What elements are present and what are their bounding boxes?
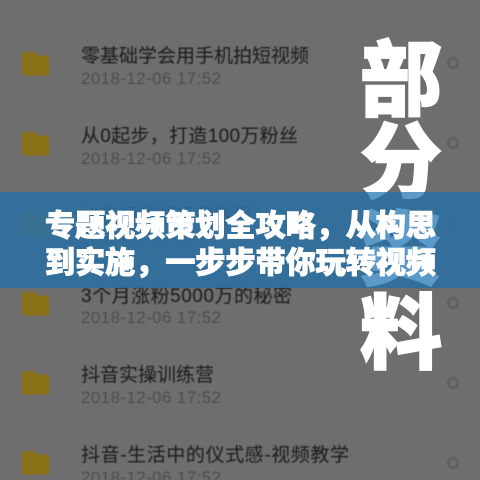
banner heading: 到实施，一步步带你玩转视频	[45, 246, 436, 280]
row 1: 2018-12-06 17:52	[81, 69, 221, 88]
row 3: 抖音短视频运营教程	[81, 205, 252, 227]
row 3	[22, 205, 458, 248]
blue banner	[0, 192, 480, 288]
large vertical title: 分	[360, 118, 442, 209]
row 5: 2018-12-06 17:52	[81, 388, 221, 407]
row 2	[22, 125, 458, 168]
large title seen through banner: 资	[360, 205, 442, 296]
row 4: 2018-12-06 17:52	[81, 308, 221, 327]
row 3: 2018-12-06 17:52	[81, 229, 221, 248]
row 2: 2018-12-06 17:52	[81, 149, 221, 168]
large title seen through banner: 分	[360, 118, 442, 209]
row 1: 零基础学会用手机拍短视频	[81, 45, 309, 67]
banner heading: 专题视频策划全攻略，从构思	[45, 209, 436, 243]
row 1	[22, 45, 458, 88]
large vertical title	[360, 36, 442, 380]
row 4: 3个月涨粉5000万的秘密	[81, 285, 292, 307]
row 2: 从0起步，打造100万粉丝	[81, 125, 298, 147]
row 6	[22, 444, 458, 480]
row 5	[22, 364, 458, 407]
banner heading	[45, 209, 436, 280]
large vertical title: 部	[360, 36, 442, 127]
row 6: 抖音-生活中的仪式感-视频教学	[81, 444, 349, 466]
row 4	[22, 285, 458, 327]
row 5: 抖音实操训练营	[81, 364, 214, 386]
large vertical title: 料	[360, 289, 442, 380]
